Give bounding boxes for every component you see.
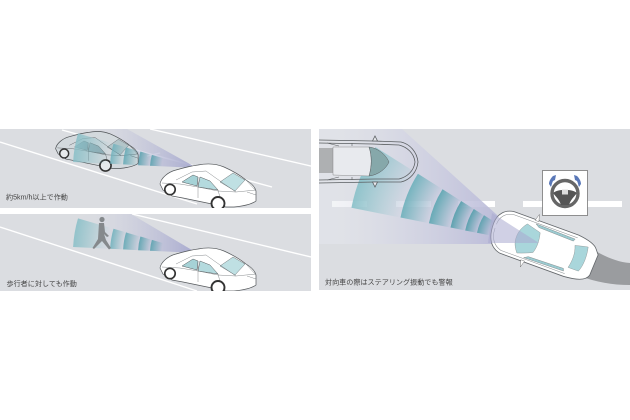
car: own vehicle bbox=[160, 248, 256, 294]
tyre track bbox=[586, 252, 630, 285]
icon: pedestrian bbox=[92, 217, 111, 250]
sensor bands: vehicle ahead bbox=[73, 134, 162, 166]
sensor cone: oncoming car bbox=[332, 141, 498, 244]
panel: pedestrian scene bbox=[0, 214, 311, 294]
caption: pedestrian: 歩行者に対しても作動 bbox=[6, 279, 77, 288]
sensor beam over hood bbox=[488, 213, 539, 243]
panel: oncoming vehicle scene bbox=[319, 129, 630, 291]
panel: following vehicle scene bbox=[0, 129, 315, 210]
caption: speed: 約5km/h以上で作動 bbox=[6, 192, 68, 202]
caption: oncoming vehicle: 対向車の際はステアリング振動でも警報 bbox=[325, 278, 453, 286]
sensor cone: pedestrian bbox=[123, 214, 192, 252]
car: oncoming vehicle top view bbox=[319, 136, 418, 187]
road dashes bbox=[332, 201, 622, 207]
sensor bands: pedestrian bbox=[73, 218, 162, 252]
car: vehicle ahead bbox=[56, 132, 138, 171]
icon: steering wheel vibration bbox=[542, 170, 588, 216]
sensor cone: vehicle ahead bbox=[123, 129, 192, 168]
car: own vehicle top view bbox=[490, 210, 598, 280]
car: own vehicle bbox=[160, 164, 256, 210]
